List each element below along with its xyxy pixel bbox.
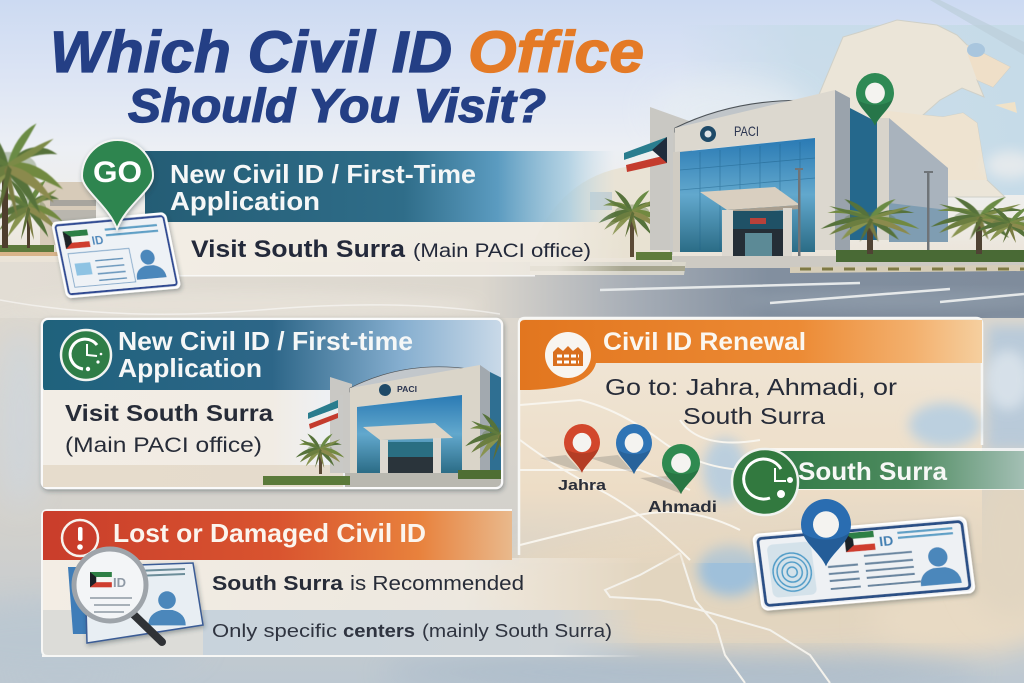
- pin: Jahra: [558, 424, 607, 494]
- PACI sign: PACI: [734, 123, 759, 139]
- GO pin: [82, 140, 153, 229]
- heading: New Civil ID / First-Time: [170, 159, 476, 189]
- note text: (mainly South Surra): [422, 621, 612, 641]
- small building image: [263, 365, 501, 487]
- map backdrop top right: [650, 0, 1024, 197]
- pin: Ahmadi: Ahmadi: [648, 499, 717, 516]
- small building image: PACI: [397, 385, 417, 394]
- pin: blue on card: [801, 499, 851, 566]
- flag on pole: [624, 130, 673, 255]
- heading: Civil ID Renewal: [603, 328, 806, 356]
- title: [50, 20, 644, 132]
- heading: Application: [118, 353, 262, 383]
- South Surra banner: South Surra: [798, 458, 948, 486]
- left background palms and building: [0, 123, 96, 256]
- note text: Only specific: [212, 621, 337, 641]
- panel: lost or damaged: [42, 510, 643, 657]
- lost ID illustration: ID: [113, 575, 126, 590]
- body text: Visit South Surra: [191, 236, 406, 263]
- title: Which Civil ID: [50, 20, 452, 85]
- note text: centers: [343, 621, 415, 641]
- pin: blue: [616, 424, 652, 474]
- South Surra banner: [732, 448, 1024, 515]
- ID card: top: [52, 213, 180, 297]
- body text: Go to: Jahra, Ahmadi, or: [605, 374, 897, 400]
- heading: Application: [170, 186, 320, 216]
- body text: (Main PACI office): [413, 241, 591, 262]
- panel: top new civil ID: [145, 151, 625, 276]
- map area under renewal panel: [380, 460, 1024, 683]
- map texture: [520, 400, 981, 560]
- title: Should You Visit?: [128, 79, 546, 132]
- ID card: fingerprint: ID: [878, 532, 894, 549]
- title: Office: [468, 20, 644, 85]
- body text: (Main PACI office): [65, 434, 262, 457]
- ID card: top: ID: [91, 233, 105, 248]
- heading: New Civil ID / First-time: [118, 326, 413, 356]
- panel: new civil ID first-time card: [42, 319, 535, 488]
- alert icon: [62, 520, 98, 556]
- body text: is Recommended: [350, 573, 524, 595]
- ID card: fingerprint: [753, 517, 975, 610]
- body text: South Surra: [683, 403, 825, 429]
- pin: Jahra: Jahra: [558, 477, 607, 494]
- pin: Ahmadi: [648, 444, 717, 516]
- map pin: green above building: [856, 73, 894, 126]
- clock icon: [61, 330, 111, 380]
- PACI sign: [700, 123, 759, 142]
- heading: Lost or Damaged Civil ID: [113, 518, 426, 548]
- clock icon: [744, 459, 792, 499]
- body text: South Surra: [212, 573, 344, 595]
- panel: civil ID renewal: [519, 318, 982, 563]
- GO pin: GO: [93, 156, 142, 189]
- lost ID illustration: [68, 549, 203, 643]
- pin shadows: [540, 455, 682, 494]
- calendar icon: [545, 332, 591, 378]
- body text: Visit South Surra: [65, 400, 273, 426]
- PACI building: [530, 90, 1024, 275]
